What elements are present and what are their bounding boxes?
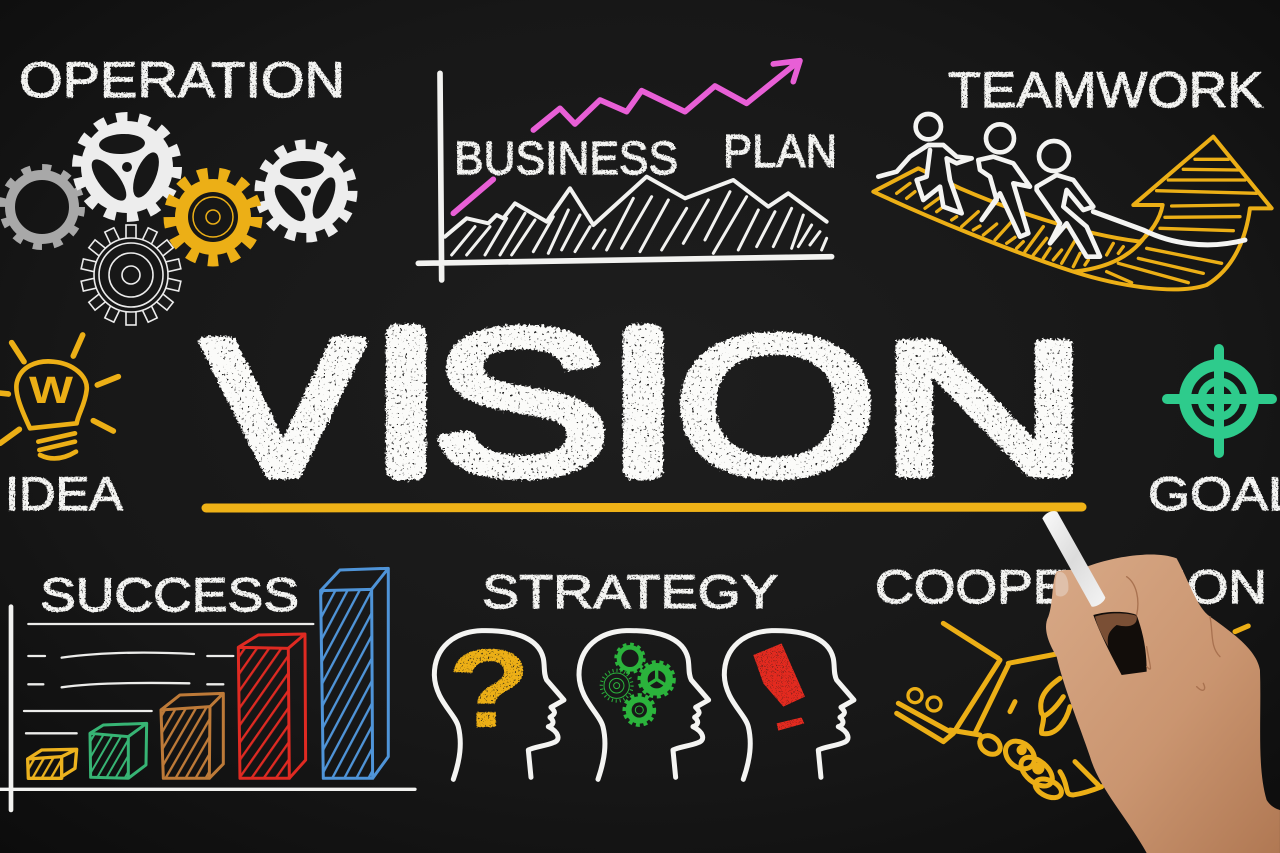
axes (4, 607, 18, 810)
icon: handshake (897, 623, 1248, 801)
icon: heads (434, 626, 854, 779)
gear: white right (260, 145, 352, 237)
rope (1093, 212, 1245, 245)
heading: vision: O (673, 295, 878, 516)
mountain line (445, 177, 827, 237)
gap between thumb and fingers (1093, 612, 1147, 675)
thumbnail (1055, 572, 1068, 597)
head: exclamation outline (724, 631, 854, 779)
heading: teamwork: TEAMWORK (948, 62, 1263, 118)
bulb letter: W (29, 370, 73, 412)
illustration: hand holding chalk (1042, 511, 1280, 853)
skin creases (1127, 577, 1220, 690)
hand (1046, 555, 1280, 853)
icon: gears (3, 118, 352, 325)
gear: outline (81, 225, 181, 325)
heading: idea: IDEA (5, 467, 124, 520)
bar: green (90, 723, 147, 778)
bar: blue (321, 568, 388, 778)
arrow: growth (453, 61, 800, 213)
heading: goal: GOAL (1148, 467, 1280, 520)
heading: success: SUCCESS (40, 568, 299, 621)
exclamation mark (753, 643, 805, 731)
mountain hatching (452, 192, 827, 255)
icon: target (1167, 349, 1272, 453)
chalk (1042, 511, 1105, 607)
heading: strategy: STRATEGY (482, 565, 778, 618)
heading: business: BUSINESS (454, 132, 678, 184)
gear: yellow (170, 174, 256, 260)
text lines (24, 624, 313, 733)
heading: plan: PLAN (723, 125, 837, 177)
icon: teamwork arrow (873, 114, 1272, 289)
bar: orange (161, 693, 223, 778)
bar: red (238, 634, 306, 778)
head: question (434, 631, 564, 779)
heading: vision (205, 288, 1090, 517)
chart: success bars (0, 568, 415, 810)
question mark: ? (447, 626, 531, 751)
gear: white large (78, 118, 176, 216)
heading: operation: OPERATION (19, 52, 345, 108)
green gears (601, 644, 674, 725)
heading: cooperation: COOPERATION (875, 560, 1267, 613)
figures (878, 114, 1100, 257)
axes (418, 73, 832, 280)
heading: vision: V (205, 302, 361, 514)
heading: vision: I (379, 293, 433, 511)
bar: yellow (28, 749, 77, 778)
head: gears outline (579, 631, 709, 779)
heading: vision: I (616, 293, 670, 511)
heading: vision: N (878, 303, 1090, 515)
heading: vision: S (432, 288, 610, 517)
icon: light bulb (0, 335, 118, 458)
curled finger (1095, 613, 1137, 647)
chart: business plan (418, 61, 832, 280)
underline: yellow (206, 507, 1082, 508)
gear: grey (3, 168, 81, 246)
arrow hatching (897, 159, 1257, 283)
arrow outline (873, 137, 1272, 289)
